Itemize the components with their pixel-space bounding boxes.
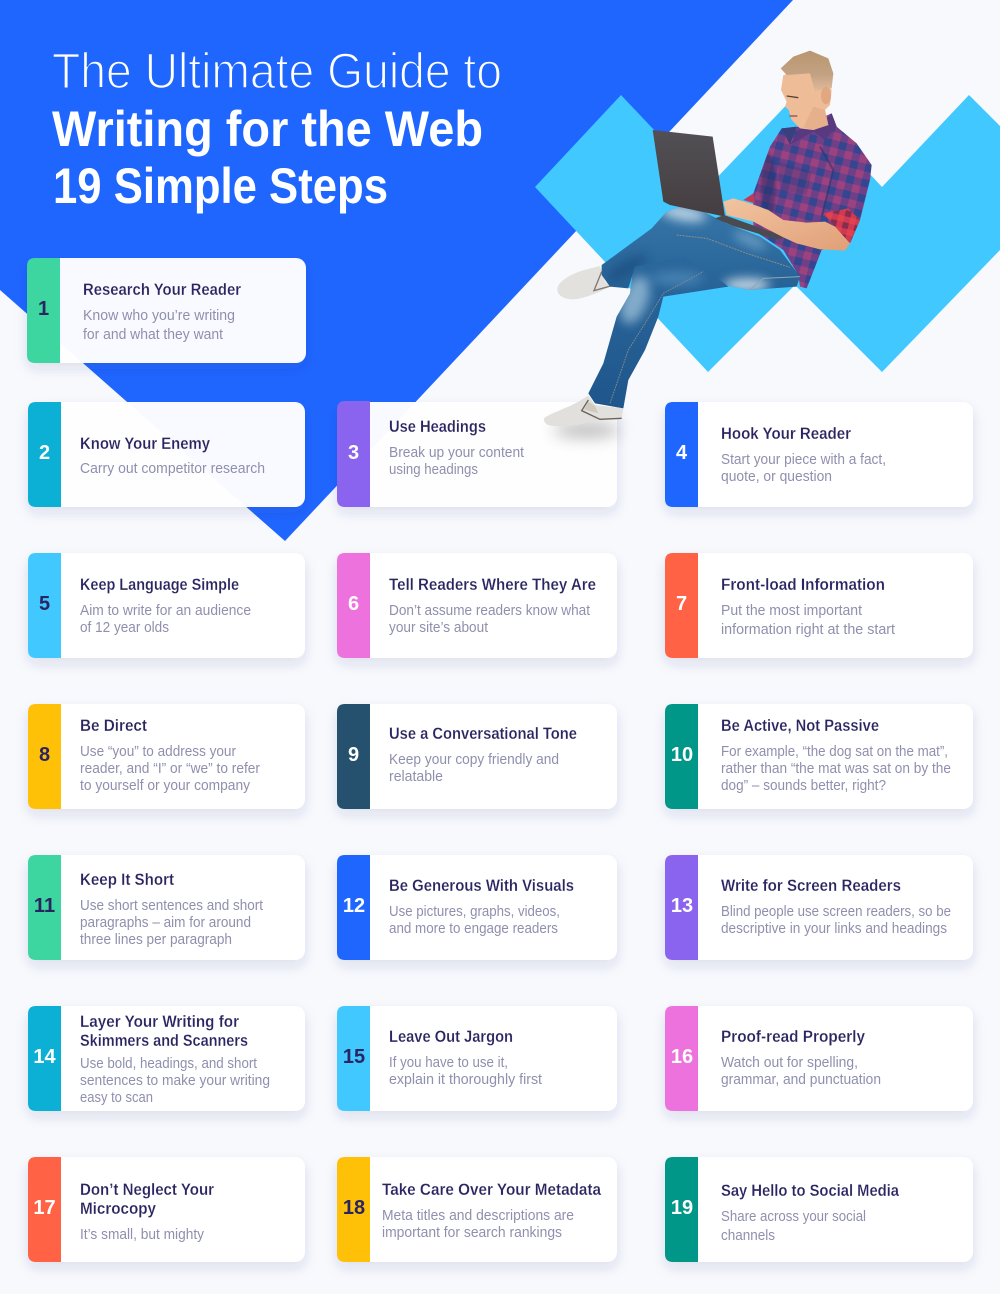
step 16 description: grammar, and punctuation bbox=[721, 1072, 881, 1088]
step 10 description bbox=[721, 744, 951, 794]
step 1 number tab bbox=[27, 258, 60, 363]
step 14 heading: Skimmers and Scanners bbox=[80, 1032, 248, 1050]
step 19 number tab: 19 bbox=[671, 1197, 693, 1219]
step 19 description: channels bbox=[721, 1228, 775, 1244]
step 8 description: Use “you” to address your bbox=[80, 744, 236, 760]
step 18 number tab bbox=[337, 1157, 370, 1262]
back leg bbox=[588, 253, 728, 408]
panel: step 11 bbox=[28, 855, 305, 960]
step 4 heading: Hook Your Reader bbox=[721, 425, 852, 443]
step 12 heading: Be Generous With Visuals bbox=[389, 877, 574, 895]
panel: step 12 bbox=[337, 855, 617, 960]
step 10 number tab bbox=[665, 704, 698, 809]
panel: step 8 bbox=[28, 704, 305, 809]
step 17 number tab: 17 bbox=[33, 1197, 56, 1219]
step 15 description: If you have to use it, bbox=[389, 1055, 508, 1071]
step 5 heading: Keep Language Simple bbox=[80, 576, 239, 594]
step 5 number tab bbox=[28, 553, 61, 658]
step 15 description bbox=[389, 1055, 542, 1088]
step 14 heading bbox=[80, 1013, 248, 1050]
panel: step 16 bbox=[665, 1006, 973, 1111]
step 16 description bbox=[721, 1055, 881, 1088]
shoe: raised foot bbox=[557, 266, 612, 299]
step 13 description bbox=[721, 904, 951, 937]
step 2 number tab bbox=[28, 402, 61, 507]
title bbox=[52, 43, 502, 214]
panel: step 19 bbox=[665, 1157, 973, 1262]
step 14 description: sentences to make your writing bbox=[80, 1073, 270, 1089]
step 8 number tab: 8 bbox=[39, 744, 50, 766]
step 5 description: Aim to write for an audience bbox=[80, 603, 251, 619]
step 4 description: quote, or question bbox=[721, 469, 832, 485]
step 6 heading: Tell Readers Where They Are bbox=[389, 576, 596, 594]
step 9 description: Keep your copy friendly and bbox=[389, 752, 559, 768]
step 14 heading: Layer Your Writing for bbox=[80, 1013, 240, 1031]
step 10 number tab: 10 bbox=[671, 744, 693, 766]
step 3 description: Break up your content bbox=[389, 445, 524, 461]
step 15 description: explain it thoroughly first bbox=[389, 1072, 542, 1088]
step 11 heading: Keep It Short bbox=[80, 871, 174, 889]
step 8 description bbox=[80, 744, 260, 794]
step 11 description: three lines per paragraph bbox=[80, 932, 232, 948]
panel: step 7 bbox=[665, 553, 973, 658]
step 9 number tab bbox=[337, 704, 370, 809]
step 11 description: Use short sentences and short bbox=[80, 898, 263, 914]
step 19 description: Share across your social bbox=[721, 1209, 866, 1225]
step 15 number tab bbox=[337, 1006, 370, 1111]
panel: step 10 bbox=[665, 704, 973, 809]
step 7 description: information right at the start bbox=[721, 622, 895, 638]
step 5 description bbox=[80, 603, 251, 636]
step 8 description: reader, and “I” or “we” to refer bbox=[80, 761, 260, 777]
step 1 description: Know who you’re writing bbox=[83, 308, 235, 324]
step 16 heading: Proof-read Properly bbox=[721, 1028, 866, 1046]
step 14 number tab: 14 bbox=[33, 1046, 56, 1068]
step 13 heading: Write for Screen Readers bbox=[721, 877, 901, 895]
step 3 heading: Use Headings bbox=[389, 418, 486, 436]
title: Writing for the Web bbox=[52, 101, 483, 157]
blue header shape bbox=[0, 0, 793, 541]
step 13 number tab: 13 bbox=[671, 895, 693, 917]
step 12 description bbox=[389, 904, 560, 937]
step 7 description bbox=[721, 603, 895, 638]
step 4 number tab bbox=[665, 402, 698, 507]
step 1 description bbox=[83, 308, 235, 343]
step 4 description bbox=[721, 452, 886, 485]
step 3 description bbox=[389, 445, 524, 478]
step 3 number tab bbox=[337, 401, 370, 507]
step 6 description: Don’t assume readers know what bbox=[389, 603, 590, 619]
panel: step 14 bbox=[28, 1006, 305, 1111]
step 18 description: Meta titles and descriptions are bbox=[382, 1208, 574, 1224]
step 15 number tab: 15 bbox=[343, 1046, 365, 1068]
step 12 description: and more to engage readers bbox=[389, 921, 558, 937]
step 2 heading: Know Your Enemy bbox=[80, 435, 211, 453]
panel: step 18 bbox=[337, 1157, 617, 1262]
step 7 description: Put the most important bbox=[721, 603, 862, 619]
step 18 number tab: 18 bbox=[343, 1197, 365, 1219]
step 12 number tab bbox=[337, 855, 370, 960]
step 10 description: dog” – sounds better, right? bbox=[721, 778, 886, 794]
step 12 description: Use pictures, graphs, videos, bbox=[389, 904, 560, 920]
step 2 number tab: 2 bbox=[39, 442, 50, 464]
step 18 heading: Take Care Over Your Metadata bbox=[382, 1181, 602, 1199]
step 17 description: It’s small, but mighty bbox=[80, 1227, 205, 1243]
light blue zigzag shape bbox=[535, 95, 1000, 372]
panel: step 2 bbox=[28, 402, 305, 507]
panel: step 6 bbox=[337, 553, 617, 658]
step 14 description: easy to scan bbox=[80, 1090, 153, 1106]
step 4 description: Start your piece with a fact, bbox=[721, 452, 886, 468]
step 16 number tab bbox=[665, 1006, 698, 1111]
panel: step 15 bbox=[337, 1006, 617, 1111]
step 5 number tab: 5 bbox=[39, 593, 50, 615]
step 1 description: for and what they want bbox=[83, 327, 223, 343]
forearm and hand bbox=[723, 198, 850, 251]
step 7 heading: Front-load Information bbox=[721, 576, 885, 594]
step 13 description: Blind people use screen readers, so be bbox=[721, 904, 951, 920]
laptop bbox=[653, 130, 787, 239]
panel: step 5 bbox=[28, 553, 305, 658]
step 16 number tab: 16 bbox=[671, 1046, 693, 1068]
step 6 number tab: 6 bbox=[348, 593, 359, 615]
front leg bbox=[602, 202, 800, 292]
step 9 number tab: 9 bbox=[348, 744, 359, 766]
step 9 description: relatable bbox=[389, 769, 443, 785]
step 8 description: to yourself or your company bbox=[80, 778, 251, 794]
panel: step 4 bbox=[665, 402, 973, 507]
step 8 number tab bbox=[28, 704, 61, 809]
head bbox=[781, 51, 833, 130]
step 4 number tab: 4 bbox=[676, 442, 688, 464]
step 11 number tab: 11 bbox=[34, 895, 55, 917]
step 13 number tab bbox=[665, 855, 698, 960]
step 11 description: paragraphs – aim for around bbox=[80, 915, 251, 931]
title: 19 Simple Steps bbox=[53, 158, 388, 214]
step 8 heading: Be Direct bbox=[80, 717, 147, 735]
step 6 description bbox=[389, 603, 590, 636]
panel: step 1 bbox=[27, 258, 306, 363]
step 13 description: descriptive in your links and headings bbox=[721, 921, 947, 937]
panel: step 17 bbox=[28, 1157, 305, 1262]
step 6 description: your site’s about bbox=[389, 620, 488, 636]
step 14 number tab bbox=[28, 1006, 61, 1111]
step 3 number tab: 3 bbox=[348, 442, 359, 464]
step 11 description bbox=[80, 898, 263, 948]
title: The Ultimate Guide to bbox=[52, 43, 502, 99]
shoe: lower foot bbox=[544, 396, 623, 426]
step 14 description: Use bold, headings, and short bbox=[80, 1056, 257, 1072]
step 10 heading: Be Active, Not Passive bbox=[721, 717, 879, 735]
step 17 number tab bbox=[28, 1157, 61, 1262]
step 7 number tab bbox=[665, 553, 698, 658]
illustration: man with laptop bbox=[544, 51, 872, 437]
step 9 heading: Use a Conversational Tone bbox=[389, 725, 577, 743]
step 12 number tab: 12 bbox=[343, 895, 365, 917]
step 19 heading: Say Hello to Social Media bbox=[721, 1182, 900, 1200]
step 9 description bbox=[389, 752, 559, 785]
step 16 description: Watch out for spelling, bbox=[721, 1055, 858, 1071]
step 10 description: rather than “the mat was sat on by the bbox=[721, 761, 951, 777]
shirt bbox=[743, 113, 872, 288]
step 19 number tab bbox=[665, 1157, 698, 1262]
step 17 heading: Microcopy bbox=[80, 1200, 157, 1218]
step 2 description: Carry out competitor research bbox=[80, 461, 265, 477]
panel: step 13 bbox=[665, 855, 973, 960]
step 6 number tab bbox=[337, 553, 370, 658]
step 10 description: For example, “the dog sat on the mat”, bbox=[721, 744, 948, 760]
panel: step 3 bbox=[337, 401, 617, 507]
step 15 heading: Leave Out Jargon bbox=[389, 1028, 513, 1046]
panel: step 9 bbox=[337, 704, 617, 809]
step 17 heading bbox=[80, 1181, 215, 1218]
step 11 number tab bbox=[28, 855, 61, 960]
step 5 description: of 12 year olds bbox=[80, 620, 169, 636]
step 3 description: using headings bbox=[389, 462, 478, 478]
step 1 heading: Research Your Reader bbox=[83, 281, 242, 299]
step 19 description bbox=[721, 1209, 866, 1244]
step 18 description bbox=[382, 1208, 574, 1241]
step 7 number tab: 7 bbox=[676, 593, 687, 615]
step 14 description bbox=[80, 1056, 270, 1106]
step 18 description: important for search rankings bbox=[382, 1225, 562, 1241]
step 1 number tab: 1 bbox=[38, 298, 49, 320]
step 17 heading: Don’t Neglect Your bbox=[80, 1181, 215, 1199]
